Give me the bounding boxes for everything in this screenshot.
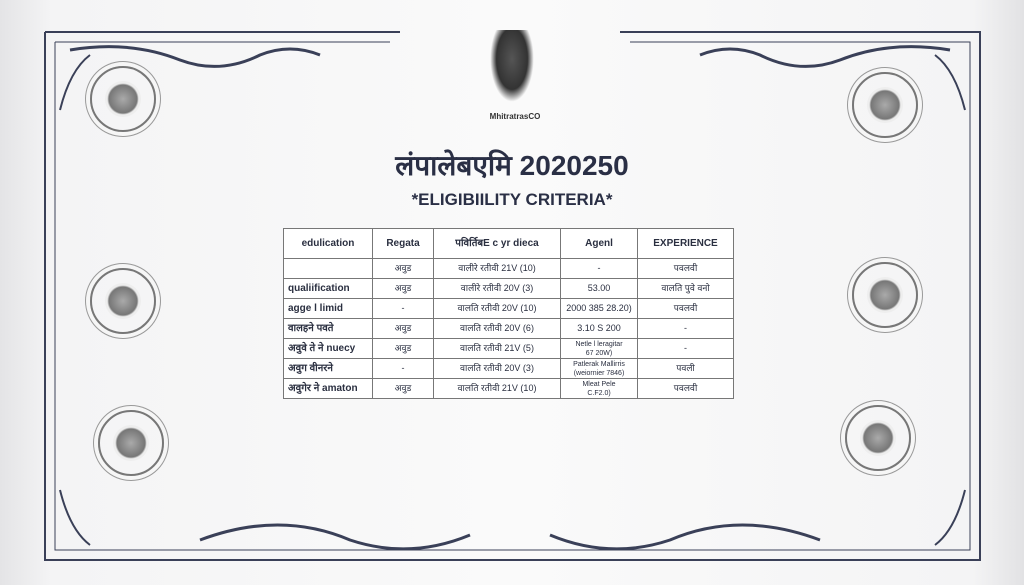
title: लंपालेबएमि 2020250 bbox=[395, 150, 629, 181]
table: - bbox=[598, 263, 600, 273]
table: Patlerak Mallirris bbox=[573, 360, 625, 368]
seal right top bbox=[852, 72, 918, 138]
table: वालहने पवते bbox=[288, 323, 334, 334]
table: वालति रतीवी 20V (3) bbox=[460, 363, 534, 373]
table: - bbox=[402, 303, 404, 313]
subtitle: *ELIGIBIILITY CRITERIA* bbox=[412, 190, 612, 209]
table: वालति रतीवी 21V (5) bbox=[460, 343, 534, 353]
table: Mleat Pele bbox=[582, 380, 616, 388]
emblem caption: MhitratrasCO bbox=[490, 112, 540, 121]
table: अवुड bbox=[395, 263, 411, 273]
table: 67 20W) bbox=[586, 350, 612, 356]
table: अवुड bbox=[395, 383, 411, 393]
table: Netle l leragitar bbox=[575, 340, 623, 348]
table: 3.10 S 200 bbox=[577, 323, 621, 333]
table: वालीरे रतीवी 20V (3) bbox=[461, 283, 533, 293]
table: वालीरे रतीवी 21V (10) bbox=[458, 263, 536, 273]
table: - bbox=[402, 363, 404, 373]
table: अवुवे ते ने nuecy bbox=[288, 343, 355, 354]
table: 53.00 bbox=[588, 283, 610, 293]
table: वालति रतीवी 20V (10) bbox=[458, 303, 536, 313]
table: - bbox=[684, 343, 687, 353]
table: वालति पुवे वनो bbox=[661, 283, 710, 293]
table: अवुग वीनरने bbox=[288, 363, 333, 374]
table: C.F2.0) bbox=[587, 390, 611, 396]
table: पवली bbox=[676, 363, 695, 373]
seal right bottom bbox=[845, 405, 911, 471]
table bbox=[283, 228, 734, 399]
table: - bbox=[684, 323, 687, 333]
table: पवलवी bbox=[674, 263, 697, 273]
table: अवुड bbox=[395, 323, 411, 333]
table: पवलवी bbox=[674, 303, 697, 313]
seal left top bbox=[90, 66, 156, 132]
table: qualiification bbox=[288, 283, 350, 294]
table: (weiornier 7846) bbox=[574, 370, 624, 376]
table: Agenl bbox=[585, 238, 613, 249]
emblem bbox=[490, 30, 534, 102]
table: edulication bbox=[302, 238, 354, 249]
table: 2000 385 28.20) bbox=[566, 303, 632, 313]
table: अवुड bbox=[395, 283, 411, 293]
table: अवुगेर ने amaton bbox=[288, 383, 358, 394]
table: पविर्तिबE c yr dieca bbox=[455, 238, 539, 249]
table: वालति रतीवी 21V (10) bbox=[458, 383, 536, 393]
table: वालति रतीवी 20V (6) bbox=[460, 323, 534, 333]
table: पवलवी bbox=[674, 383, 697, 393]
table: agge l limid bbox=[288, 303, 343, 314]
seal left bottom bbox=[98, 410, 164, 476]
table: अवुड bbox=[395, 343, 411, 353]
table: EXPERIENCE bbox=[653, 238, 718, 249]
table: Regata bbox=[386, 238, 420, 249]
seal right middle bbox=[852, 262, 918, 328]
seal left middle bbox=[90, 268, 156, 334]
